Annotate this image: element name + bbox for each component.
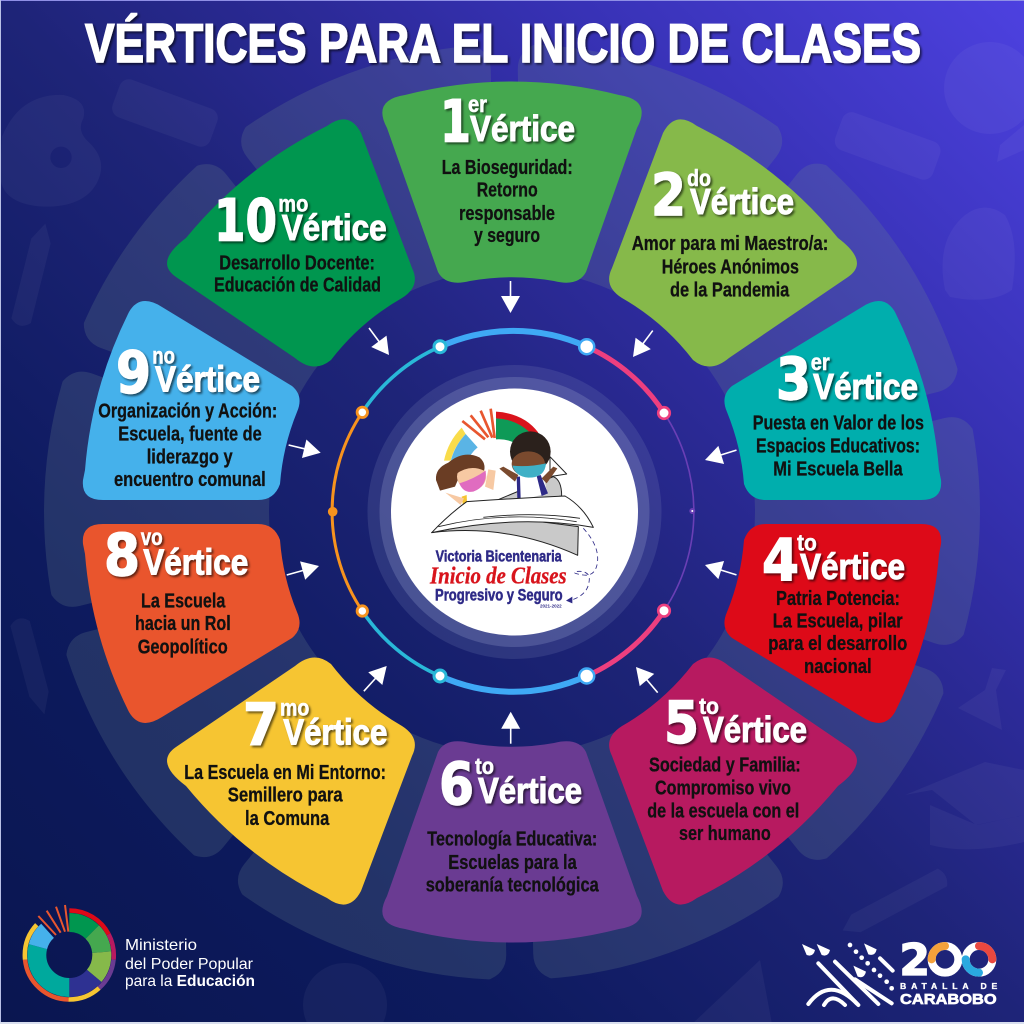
- body text: Retorno: [477, 180, 538, 202]
- body text: soberanía tecnológica: [426, 875, 599, 897]
- heading: vo: [141, 524, 163, 550]
- ministry text: [125, 937, 255, 990]
- body text: [768, 588, 907, 678]
- petal shape: [724, 524, 941, 723]
- icon: diploma right: [832, 109, 943, 183]
- petal shape: [83, 301, 300, 500]
- heading: to: [797, 530, 817, 556]
- body text: [753, 412, 924, 481]
- petal shape: [83, 524, 300, 723]
- heading: [104, 521, 248, 589]
- panel: 2do vértice: [609, 119, 857, 367]
- body text: ser humano: [679, 823, 771, 845]
- body text: Puesta en Valor de los: [753, 412, 924, 434]
- body text: de la escuela con el: [647, 800, 799, 822]
- body text: La Escuela, pilar: [773, 611, 903, 633]
- icon: girl with mask: [436, 455, 496, 514]
- heading: Vértice: [478, 770, 582, 811]
- icon: brushes and arches: [802, 943, 894, 1005]
- petal shape: [382, 741, 642, 943]
- body text: [442, 157, 573, 247]
- icon: paper plane back fin: [493, 457, 567, 507]
- body text: [98, 401, 277, 491]
- heading: [243, 691, 387, 759]
- body text: de la Pandemia: [670, 280, 790, 302]
- arrow 10: [361, 322, 397, 361]
- heading: 6: [439, 750, 474, 818]
- heading: [651, 161, 794, 229]
- dashed flight path: [566, 528, 598, 603]
- heading: 7: [243, 691, 279, 759]
- icon: fan emblem: [444, 409, 538, 463]
- body text: Organización y Acción:: [98, 401, 277, 423]
- heading: Vértice: [470, 108, 575, 149]
- body text: Geopolítico: [138, 636, 228, 658]
- center logo: Inicio de Clases: [391, 388, 638, 636]
- heading: 5: [664, 689, 699, 757]
- heading: no: [152, 342, 175, 368]
- body text: Espacios Educativos:: [756, 435, 920, 457]
- logo text: Inicio de Clases: [429, 563, 567, 589]
- heading: Vértice: [800, 546, 905, 587]
- body text: Escuelas para la: [448, 852, 577, 874]
- icon: pencil left top: [10, 221, 55, 328]
- heading: 1: [440, 88, 471, 156]
- petal shape: [609, 657, 857, 905]
- heading: 10: [214, 187, 277, 255]
- icon: backpack: [942, 208, 1015, 300]
- heading: to: [699, 693, 719, 719]
- heading: 8: [104, 521, 140, 589]
- batalla de carabobo text: BATALLA DE: [900, 981, 998, 991]
- arrow 1: [501, 281, 520, 313]
- icon: boy with mask: [499, 431, 557, 501]
- icon: pencil left bottom: [9, 616, 54, 717]
- arrow 2: [625, 325, 660, 363]
- 200 numerals: [899, 936, 992, 986]
- heading: mo: [278, 191, 308, 217]
- heading: Vértice: [690, 181, 794, 222]
- arrow 3: [702, 441, 739, 469]
- logo text: Progresivo y Seguro: [435, 586, 563, 605]
- icon: flask: [958, 668, 1006, 730]
- ministry text: para la Educación: [125, 973, 255, 990]
- body text: [184, 762, 386, 830]
- heading: [440, 88, 575, 156]
- heading: to: [475, 753, 494, 779]
- heading: 9: [116, 338, 151, 406]
- body text: Semillero para: [228, 785, 343, 807]
- panel: 7mo vértice: [167, 657, 415, 905]
- body text: encuentro comunal: [114, 469, 266, 491]
- outer ring of rounded sectors: [156, 156, 868, 868]
- panel: 6to vértice: [382, 741, 642, 943]
- heading: 2: [651, 161, 686, 229]
- body text: nacional: [804, 656, 872, 678]
- heading: 4: [762, 526, 799, 594]
- body text: Escuela, fuente de: [118, 424, 262, 446]
- body text: [426, 829, 599, 897]
- icon: pencil right bottom: [838, 867, 950, 939]
- center concentric bands: [368, 365, 662, 659]
- petal shape: [167, 119, 415, 367]
- body text: Desarrollo Docente:: [219, 252, 375, 274]
- arrow 4: [702, 556, 739, 584]
- heading: [776, 345, 918, 413]
- heading: 3: [776, 345, 811, 413]
- body text: hacia un Rol: [135, 613, 231, 635]
- icon: graduation cap: [905, 762, 1024, 849]
- panel: 9no vértice: [83, 301, 300, 500]
- icon: paper plane wing: [432, 496, 593, 555]
- body text: Compromiso vivo: [655, 777, 791, 799]
- icon: basketball: [303, 963, 387, 1024]
- 200 numerals: 2: [899, 936, 930, 986]
- body text: La Escuela en Mi Entorno:: [184, 762, 386, 784]
- icon: set square: [692, 960, 772, 1024]
- body text: Mi Escuela Bella: [773, 459, 903, 481]
- icon: paint palette: [0, 95, 101, 207]
- icon: globe: [944, 42, 1024, 162]
- center ring with dots: [328, 331, 694, 692]
- body text: Amor para mi Maestro/a:: [632, 233, 828, 255]
- icon: ministry ring: [25, 905, 114, 1000]
- heading: [214, 187, 387, 255]
- body text: Educación de Calidad: [214, 275, 381, 297]
- heading: Vértice: [143, 541, 248, 582]
- ministry text: Ministerio: [125, 937, 197, 954]
- body text: y seguro: [474, 225, 540, 247]
- arrow 7: [357, 660, 394, 698]
- body text: para el desarrollo: [768, 633, 907, 655]
- panel: 5to vértice: [609, 657, 857, 905]
- panel: 3er vértice: [724, 301, 941, 500]
- heading: [664, 689, 807, 757]
- heading: Vértice: [813, 366, 918, 407]
- ministry text: del Poder Popular: [125, 956, 254, 973]
- petal shape: [724, 301, 941, 500]
- arrow 9: [286, 436, 323, 462]
- panel: 8vo vértice: [83, 521, 300, 723]
- body text: [647, 755, 801, 845]
- body text: [214, 252, 381, 297]
- arrows pointing to the center: [284, 281, 739, 744]
- heading: Vértice: [283, 711, 387, 752]
- heading: Vértice: [703, 709, 807, 750]
- body text: Patria Potencia:: [776, 588, 900, 610]
- panel: 10mo vértice: [167, 119, 415, 367]
- arrow 6: [501, 712, 520, 744]
- petal shape: [609, 119, 857, 367]
- body text: liderazgo y: [147, 446, 233, 468]
- white disc: [391, 388, 638, 636]
- body text: la Comuna: [245, 808, 330, 830]
- logo: Ministerio del Poder Popular para la Educación: [25, 905, 255, 1000]
- heading: do: [687, 165, 711, 191]
- body text: responsable: [459, 203, 555, 225]
- heading: er: [811, 349, 830, 375]
- body text: Héroes Anónimos: [662, 256, 799, 278]
- heading: mo: [280, 695, 309, 721]
- logo text: [429, 549, 567, 609]
- arrow 5: [629, 661, 665, 699]
- panel: 1er vértice: [382, 81, 642, 283]
- body text: Tecnología Educativa:: [427, 829, 597, 851]
- body text: [632, 233, 828, 302]
- petal shape: [167, 657, 415, 905]
- body text: [135, 591, 231, 658]
- logo text: Victoria Bicentenaria: [436, 549, 562, 566]
- body text: Sociedad y Familia:: [649, 755, 801, 777]
- petal shape: [382, 81, 642, 283]
- body text: La Bioseguridad:: [442, 157, 573, 179]
- batalla de carabobo text: [900, 981, 998, 1008]
- panel: 4to vértice: [724, 524, 941, 723]
- heading: er: [468, 91, 487, 117]
- logo text: 2021-2022: [540, 604, 562, 609]
- body text: La Escuela: [141, 591, 226, 613]
- heading: Vértice: [155, 359, 260, 400]
- logo: 200 Batalla de Carabobo: [802, 936, 998, 1008]
- arrow 8: [284, 557, 322, 584]
- heading: Vértice: [282, 207, 387, 248]
- batalla de carabobo text: CARABOBO: [900, 992, 997, 1008]
- heading: [762, 526, 905, 594]
- icon: diploma left: [109, 76, 221, 150]
- heading: [116, 338, 260, 406]
- heading: [439, 750, 582, 818]
